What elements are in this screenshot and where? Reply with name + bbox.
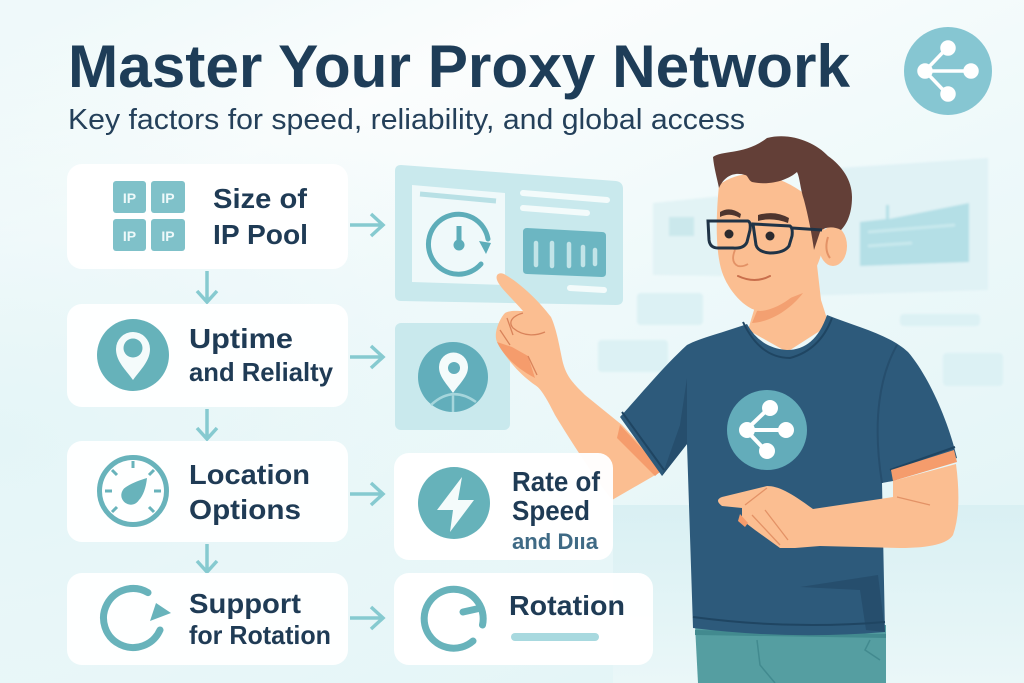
icon: rotation arrow (104, 589, 171, 648)
panel: location options: Options (189, 494, 301, 525)
icon: IP grid (113, 181, 185, 251)
background interface panels (598, 158, 1003, 386)
head (708, 136, 852, 311)
neck (748, 265, 829, 352)
panel: rate of speed: Rate of (512, 466, 601, 497)
panel: uptime and reliability: Uptime (189, 323, 293, 354)
icon: location pin (97, 319, 169, 391)
progress bar (511, 633, 599, 641)
person (496, 136, 958, 683)
panel: rate of speed: Speed (512, 495, 590, 526)
panel: rotation (394, 573, 653, 665)
panel: dashboard illustration (395, 165, 623, 305)
icon: IP grid: IP (123, 190, 136, 206)
flow arrows (197, 214, 383, 629)
panel: support for rotation: Support (189, 588, 301, 619)
panel: uptime and reliability: and Relialty (189, 357, 334, 387)
pants (695, 625, 886, 683)
icon: shirt logo (727, 390, 807, 470)
panel: support for rotation: for Rotation (189, 620, 331, 650)
panel: rate of speed (394, 453, 613, 560)
panel: size of IP pool: IP Pool (213, 219, 308, 250)
panel: location options: Location (189, 459, 310, 490)
pointing arm (496, 273, 664, 500)
icon: rotation ring (424, 589, 483, 648)
panel: location options (67, 441, 348, 542)
panel: support for rotation (67, 573, 348, 665)
right arm and hand (718, 450, 958, 548)
icon: network logo badge (904, 27, 992, 115)
glasses (708, 221, 822, 253)
hair (713, 136, 852, 250)
panel: size of IP pool: Size of (213, 183, 308, 214)
panel: size of IP pool (67, 164, 348, 269)
bar graphic (523, 228, 606, 277)
icon: lightning bolt (418, 467, 490, 539)
subtitle: Key factors for speed, reliability, and global access (68, 104, 745, 136)
icon: IP grid: IP (123, 228, 136, 244)
icon: clock refresh (428, 214, 491, 274)
panel: location illustration (395, 323, 510, 430)
title: Master Your Proxy Network (68, 33, 851, 100)
panel: rotation: Rotation (509, 590, 625, 621)
shirt (620, 315, 957, 635)
icon: IP grid: IP (161, 190, 175, 206)
icon: speed gauge (100, 458, 166, 524)
icon: IP grid: IP (161, 228, 175, 244)
panel: rate of speed: and Dııa (512, 529, 599, 554)
panel: uptime and reliability (67, 304, 348, 407)
